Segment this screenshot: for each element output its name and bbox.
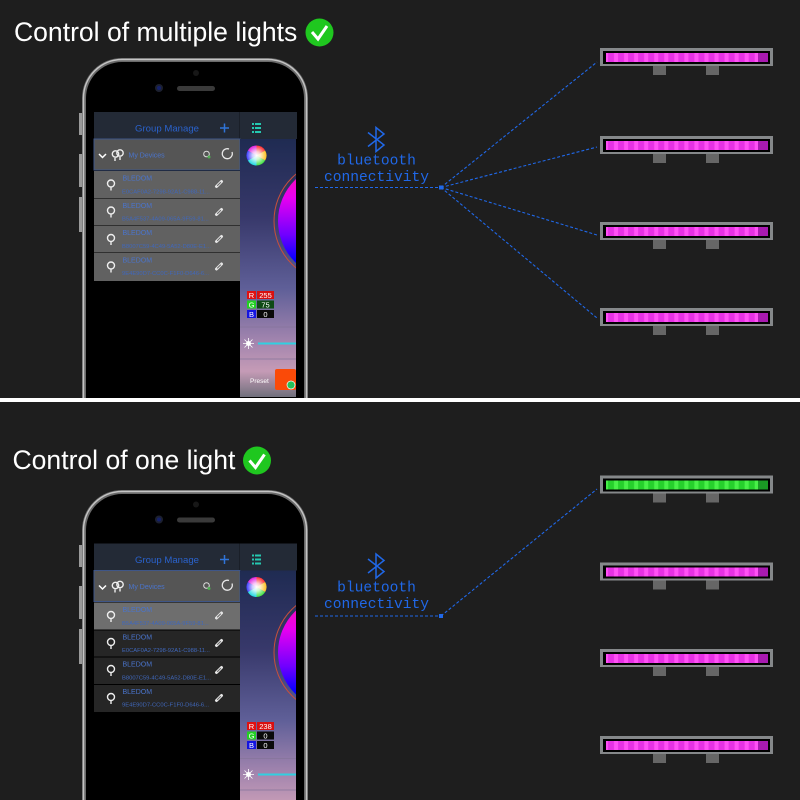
row 3: BLEDOM: [122, 230, 152, 237]
light 6: [600, 562, 773, 590]
label: bluetooth connectivity bottom: connectivity: [324, 597, 429, 613]
icon: bluetooth bottom: [368, 554, 384, 578]
phone: bottom: [79, 490, 308, 800]
color control panel: R: [249, 722, 255, 731]
light 4: [600, 308, 773, 335]
row 1: [108, 607, 222, 627]
row 4: [108, 258, 222, 277]
row 2: [108, 634, 222, 654]
color control panel: G: [249, 300, 255, 310]
app header: Group Manage: [135, 124, 199, 134]
color control panel: R: [249, 291, 255, 300]
row 1: [108, 176, 222, 196]
divider band: [0, 398, 800, 402]
label: bluetooth connectivity top: bluetooth: [337, 154, 416, 170]
row 3: B8007C59-4C49-5A52-D80E-E1...: [122, 676, 211, 682]
connection lines: one to four: [315, 62, 597, 318]
device list: [94, 570, 240, 712]
icon: bluetooth top: [368, 128, 384, 152]
app header: [94, 544, 297, 570]
app header: Group Manage: [135, 555, 199, 566]
color control panel: 0: [263, 732, 268, 740]
row 3: BLEDOM: [122, 662, 152, 668]
label: bluetooth connectivity top: connectivity: [324, 170, 429, 186]
row 1: BLEDOM: [122, 176, 152, 182]
phone body: [82, 58, 308, 398]
light 5: green: [600, 476, 773, 502]
row 4: BLEDOM: [122, 258, 152, 264]
side buttons: [79, 113, 82, 232]
row 2: BLEDOM: [122, 634, 152, 642]
light 8: [600, 736, 773, 763]
phone earpiece and camera: [155, 502, 215, 524]
icon: green check top: [306, 18, 334, 46]
side buttons: [79, 545, 82, 664]
label: bluetooth connectivity top: [324, 154, 429, 186]
light 3: [600, 222, 773, 249]
row 4: 9E4E90D7-CC0C-F1F0-D646-6...: [122, 271, 209, 277]
color control panel: 0: [263, 310, 268, 319]
phone earpiece and camera: [155, 70, 215, 92]
light 1: [600, 48, 773, 75]
row 2: [108, 203, 222, 222]
row 1: E0CAF0A2-7298-92A1-C988-11...: [122, 190, 210, 196]
color control panel: [240, 570, 296, 800]
label: bluetooth connectivity bottom: bluetooth: [337, 580, 416, 596]
connection line: one to one: [315, 489, 597, 618]
app header: [94, 112, 297, 139]
row 1: BLEDOM: [122, 607, 152, 614]
icon: green check bottom: [243, 446, 271, 474]
color control panel: Preset: [250, 378, 269, 385]
row 1: B5A4F537-4A09-065A-9F59-81...: [122, 621, 209, 627]
row 3: [108, 230, 222, 250]
row 3: [108, 662, 222, 682]
light 7: [600, 649, 773, 676]
color control panel: 75: [261, 300, 270, 310]
color control panel: [240, 139, 296, 397]
device list: My Devices: [128, 152, 165, 160]
title: one light: Control of one light: [12, 445, 236, 475]
color control panel: 255: [259, 291, 272, 300]
row 2: BLEDOM: [122, 203, 152, 210]
device list: My Devices: [128, 584, 165, 591]
light 2: [600, 136, 773, 163]
row 2: E0CAF0A2-7298-92A1-C988-11...: [122, 648, 210, 654]
row 4: 9E4E90D7-CC0C-F1F0-D646-6...: [122, 702, 209, 708]
color control panel: B: [249, 310, 254, 319]
phone body: [82, 490, 308, 800]
device list: [94, 139, 240, 281]
row 4: [108, 689, 222, 708]
row 3: B8007C59-4C49-5A52-D80E-E1...: [122, 244, 211, 250]
color control panel: 238: [259, 722, 272, 731]
row 2: B5A4F537-4A09-065A-9F59-81...: [122, 216, 209, 222]
row 4: BLEDOM: [122, 689, 152, 696]
color control panel: 0: [263, 741, 268, 750]
color control panel: G: [249, 732, 255, 740]
label: bluetooth connectivity bottom: [324, 580, 429, 613]
color control panel: B: [249, 741, 254, 750]
title: multiple lights: Control of multiple lights: [14, 17, 297, 47]
phone: top: [79, 58, 308, 398]
